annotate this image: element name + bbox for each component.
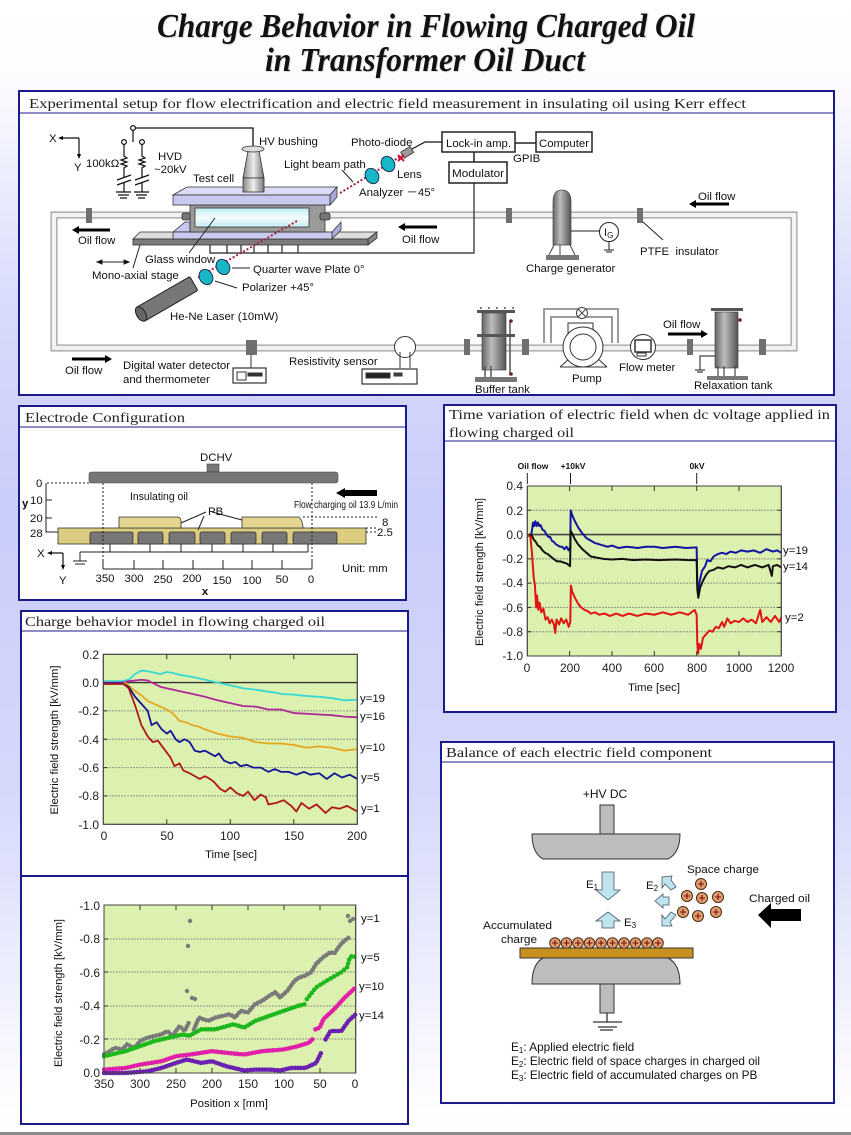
PB barriers and lower electrodes [58,517,366,544]
axis labels: y=2 [785,612,804,624]
setup labels: Test cell [193,173,234,185]
electrode labels: DCHV [200,452,233,464]
flow meter [630,334,656,360]
E3 arrow [596,912,620,928]
photo-diode [398,142,442,161]
line chart: field vs time with dc voltage [474,461,808,694]
balance labels: E [586,879,594,891]
X Y axes: X [49,133,57,145]
electrode labels: 250 [153,574,173,586]
PB plate [520,948,693,958]
electrode labels: 300 [124,573,144,585]
electrode labels: 28 [30,528,43,540]
setup labels: Relaxation tank [694,380,773,392]
curve y=14 [527,531,781,598]
axes X Y symbol: X [37,548,45,560]
axes X Y symbol [37,548,67,587]
axis labels: -0.6 [79,966,100,980]
lock-in, computer and modulator boxes: Lock-in amp. [446,138,511,150]
axis labels: 100 [274,1077,294,1091]
balance labels: E [646,880,654,892]
axis labels: 0.0 [82,676,99,690]
setup labels: Quarter wave Plate 0° [253,264,365,276]
balance labels: charge [501,934,537,946]
setup labels: ~20kV [154,164,187,176]
flow arrow [336,488,377,498]
axis labels: 50 [313,1077,327,1091]
title: Charge Behavior in Flowing Charged Oil [158,9,696,46]
axis labels: Position x [mm] [190,1098,268,1110]
axis labels: y=19 [360,693,385,705]
axis labels: -1.0 [79,899,100,913]
axis labels: 0 [352,1077,359,1091]
scatter chart: field vs position [53,899,384,1110]
setup labels: He-Ne Laser (10mW) [170,311,278,323]
charge generator: I [604,227,607,239]
pump with bypass and valve [544,308,618,367]
E2 arrows [655,876,676,926]
axis labels: -0.4 [502,576,523,590]
X Y axes: Y [74,162,82,174]
axis labels: 0.2 [506,504,523,518]
balance labels: Accumulated [483,920,552,932]
lock-in, computer and modulator boxes: Computer [539,138,589,150]
setup labels: and thermometer [123,374,210,386]
axis labels [53,899,384,1110]
balance labels: 3 [632,921,637,930]
series y=14 [104,1014,356,1073]
axis labels: 1200 [768,661,795,675]
outlier points [185,914,355,1001]
axis labels: 400 [602,661,622,675]
electrode labels: 350 [95,573,115,585]
axis labels: 200 [202,1077,222,1091]
axis labels: y=14 [359,1010,384,1022]
axis labels: y=5 [361,772,380,784]
pipe flanges and PTFE insulators [86,208,766,355]
event annotations: +10kV [561,461,586,471]
curve y=1 [103,684,357,813]
axis labels: -1.0 [502,649,523,663]
electrode labels: 0 [36,478,42,490]
axis labels: y=1 [361,803,380,815]
axis labels: 200 [560,661,580,675]
setup labels: Lens [397,169,422,181]
setup labels: Digital water detector [123,360,230,372]
electrode labels: Insulating oil [130,491,188,503]
electrode labels: Flow charging oil 13.9 L/min [294,500,398,511]
balance labels: Space charge [687,864,759,876]
setup labels: Oil flow [402,234,440,246]
axis labels: -0.2 [78,704,99,718]
upper HV electrode [532,805,680,859]
electrode labels: 200 [182,573,202,585]
charge generator [546,190,618,260]
panel: field vs position [21,876,408,1124]
heading: electrode configuration: Electrode Configuration [25,411,185,426]
setup labels: Resistivity sensor [289,356,378,368]
axis labels: -0.2 [79,1033,100,1047]
axis labels: Time [sec] [205,849,257,861]
water detector and resistivity sensor [233,336,417,384]
test cell on mono-axial stage [133,187,377,245]
HV bushing [135,128,264,192]
axis labels: 150 [238,1077,258,1091]
lock-in, computer and modulator boxes: Modulator [452,168,504,180]
heading: experimental setup: Experimental setup for flow electrification and electric field measurement in insulating oil using Kerr effect [29,97,746,112]
axis labels: 100 [220,829,240,843]
title [157,8,696,80]
axis labels: 0.2 [82,648,99,662]
curve y=2 [527,535,781,654]
balance labels: E [624,917,632,929]
axis labels: y=16 [360,711,385,723]
axis labels: -1.0 [78,818,99,832]
axis labels: 50 [160,829,174,843]
legend: E [511,1068,519,1082]
setup labels [65,136,773,396]
heading: time variation: flowing charged oil [449,426,574,441]
axis labels: 0 [101,829,108,843]
setup labels: HVD [158,151,182,163]
axis labels: 0 [524,661,531,675]
axis labels: 0.4 [506,479,523,493]
balance labels: 2 [654,884,659,893]
curve y=19 [103,671,357,700]
electrode labels: 0 [308,574,314,586]
setup labels: Glass window [145,254,216,266]
charge generator: G [607,231,613,240]
electrode labels: 8 [382,517,388,529]
event annotations [518,461,705,484]
panel: balance of electric field components [441,742,834,1103]
axis labels: 800 [687,661,707,675]
series y=1 [104,937,350,1055]
axis labels: 200 [347,829,367,843]
electrode labels: Unit: mm [342,563,388,575]
axis labels: -0.8 [78,789,99,803]
setup labels: Mono-axial stage [92,270,179,282]
HVD circuit [116,126,149,198]
setup labels: Oil flow [78,235,116,247]
axis labels: Electric field strength [kV/mm] [53,919,65,1067]
axis labels: Time [sec] [628,682,680,694]
axis labels: Electric field strength [kV/mm] [474,498,486,646]
curve y=19 [527,510,781,593]
dimension lines and comb [46,483,378,569]
axis labels: -0.8 [79,932,100,946]
electrode comb and modulator line [210,183,474,253]
line chart: field vs time [49,648,385,861]
setup labels: Polarizer +45° [242,282,314,294]
setup labels: Oil flow [698,191,736,203]
setup labels: Charge generator [526,263,615,275]
series y=5 [104,955,356,1056]
legend: E [511,1054,519,1068]
setup labels: PTFE insulator [640,246,719,258]
top HV electrode [89,464,338,483]
legend: : Electric field of space charges in charged oil [523,1054,760,1068]
axis labels [49,648,385,861]
setup labels: Flow meter [619,362,676,374]
electrode labels: 100 [242,575,262,587]
panel: time variation of electric field [444,405,836,712]
heading: charge behavior model: Charge behavior model in flowing charged oil [25,615,325,630]
panel: balance of electric field components: +HV DC [583,787,628,801]
oil pipe loop [54,215,794,348]
electrode labels: y [22,498,29,510]
balance labels [483,864,810,946]
setup labels: Oil flow [663,319,701,331]
axis labels: 0.0 [83,1066,100,1080]
curve y=5 [103,683,357,779]
panel: experimental setup [19,91,834,396]
axis labels: -0.4 [79,999,100,1013]
oil flow arrows [72,200,729,363]
axis labels: -0.2 [502,552,523,566]
axis labels: 0.0 [506,528,523,542]
panel: charge behavior model [21,611,408,876]
axis labels: 1000 [726,661,753,675]
setup labels: Buffer tank [475,384,530,396]
axis labels: 250 [166,1077,186,1091]
space charge particles [678,878,724,922]
curve y=10 [103,683,357,751]
axis labels: y=14 [783,561,808,573]
optics: lenses, polarizer, plate [196,154,398,287]
heading: time variation: Time variation of electric field when dc voltage applied in [449,408,830,423]
event annotations: 0kV [689,461,705,471]
setup labels: Photo-diode [351,137,412,149]
setup labels: Oil flow [65,365,103,377]
electrode labels: 20 [30,513,43,525]
electrode labels: 150 [212,575,232,587]
charged oil arrow [758,903,801,928]
electrode labels: 50 [276,574,288,586]
legend: : Electric field of accumulated charges on PB [523,1068,758,1082]
electrode labels: 10 [30,495,43,507]
axis labels: y=5 [361,952,380,964]
electrode labels [22,452,398,598]
axis labels: -0.4 [78,733,99,747]
axis labels: y=10 [359,981,384,993]
axis labels: -0.6 [502,601,523,615]
heading: time variation [449,408,830,441]
setup labels: 100kΩ [86,158,120,170]
balance labels: 1 [594,883,599,892]
series y=10 [104,987,356,1070]
title: in Transformer Oil Duct [265,42,586,79]
legend: 1 [519,1046,524,1055]
setup labels: Analyzer －45° [359,187,435,199]
He-Ne laser [133,277,198,323]
leader lines [97,170,663,288]
setup labels: GPIB [513,153,540,165]
event annotations: Oil flow [518,461,549,471]
legend: : Applied electric field [523,1040,634,1054]
title: in Transformer Oil Duct [266,43,587,80]
setup labels: Pump [572,373,602,385]
axis labels [474,479,808,694]
legend: E [511,1040,519,1054]
E1 arrow [596,872,620,900]
heading: balance: Balance of each electric field component [446,746,712,761]
title: Charge Behavior in Flowing Charged Oil [157,8,695,45]
X Y axes [49,133,82,174]
electrode labels: 2.5 [377,527,393,539]
electrode labels: x [202,586,209,598]
axis labels: -0.8 [502,625,523,639]
axis labels: -0.6 [78,761,99,775]
buffer tank [475,307,517,382]
axis labels: y=19 [783,545,808,557]
legend: 3 [519,1074,524,1083]
light beam path [197,155,403,278]
legend: 2 [519,1060,524,1069]
axis labels: 300 [130,1077,150,1091]
setup labels: Light beam path [284,159,366,171]
lower grounded electrode [532,958,680,1030]
axis labels: 600 [644,661,664,675]
accumulated charge particles [550,938,663,948]
relaxation tank [695,308,748,380]
balance labels: Charged oil [749,893,810,905]
axis labels: y=10 [360,742,385,754]
panel: electrode configuration [19,406,406,600]
setup labels: HV bushing [259,136,318,148]
lock-in, computer and modulator boxes [442,132,592,183]
axis labels: y=1 [361,913,380,925]
axes X Y symbol: Y [59,575,67,587]
axis labels: 350 [94,1077,114,1091]
curve y=16 [103,680,357,717]
electrode labels: PB [208,506,223,518]
axis labels: Electric field strength [kV/mm] [49,666,61,814]
legend [511,1040,760,1083]
axis labels: 150 [284,829,304,843]
